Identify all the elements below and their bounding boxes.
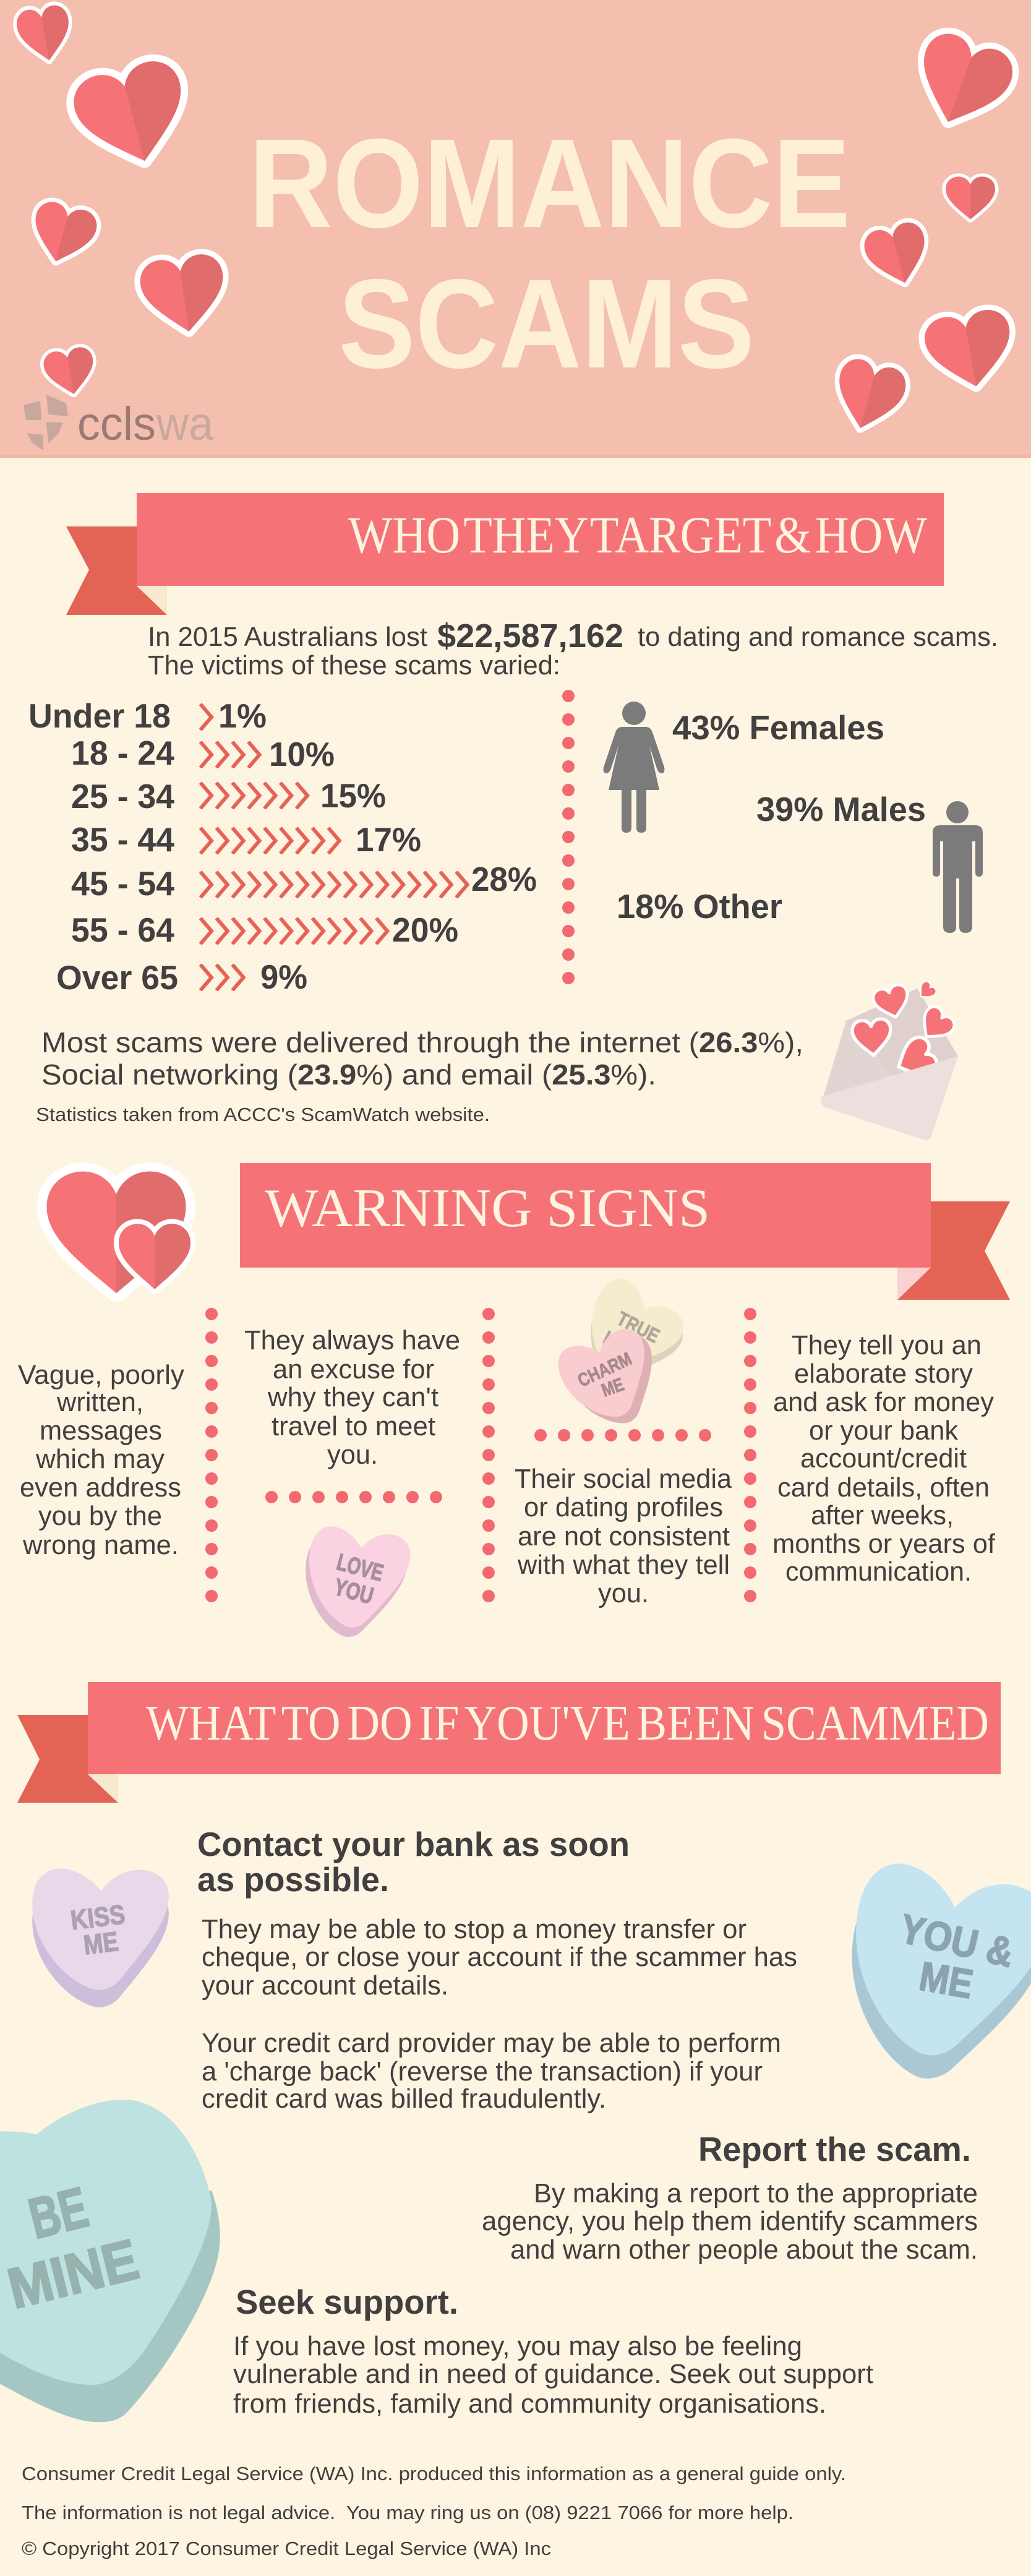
footer: Consumer Credit Legal Service (WA) Inc. produced this information as a general guide only. bbox=[22, 2463, 846, 2484]
row: 25-34: 15% bbox=[320, 777, 386, 815]
contact bank text: cheque, or close your account if the scammer has bbox=[202, 1942, 797, 1972]
warning 1 text: which may bbox=[35, 1444, 165, 1474]
candy heart: you and me: ME bbox=[916, 1952, 977, 2007]
heading: contact your bank: as possible. bbox=[197, 1861, 389, 1899]
header panel bbox=[0, 0, 1031, 458]
row: over 65 bbox=[56, 958, 307, 997]
title: SCAMS bbox=[338, 253, 755, 395]
candy heart: charm me: ME bbox=[599, 1374, 627, 1401]
warning 2 text: why they can't bbox=[267, 1382, 438, 1412]
row: 45-54: 28% bbox=[471, 861, 537, 898]
warning 4 text: card details, often bbox=[777, 1472, 990, 1503]
row: under 18 bbox=[28, 697, 267, 735]
row: under 18: 1% bbox=[218, 697, 267, 735]
banner: warning signs bbox=[240, 1163, 1010, 1300]
heading: contact your bank bbox=[197, 1826, 630, 1899]
heading: report the scam: Report the scam. bbox=[698, 2131, 971, 2168]
candy heart: true love: LOVE bbox=[600, 1326, 649, 1367]
candy heart: love you bbox=[297, 1524, 413, 1644]
footer: © Copyright 2017 Consumer Credit Legal Service (WA) Inc bbox=[22, 2538, 551, 2559]
candy heart: true love bbox=[565, 1271, 694, 1399]
intro text: $22,587,162 bbox=[437, 617, 623, 655]
row: over 65: Over 65 bbox=[56, 959, 178, 997]
row: 55-64 bbox=[71, 911, 458, 949]
candy heart: love you: LOVE bbox=[334, 1549, 386, 1587]
intro text bbox=[148, 617, 998, 680]
warning 4 text: months or years of bbox=[772, 1529, 996, 1559]
row: 55-64: 55 - 64 bbox=[71, 911, 175, 949]
icon: envelope with hearts bbox=[821, 979, 958, 1140]
row: 35-44 bbox=[71, 821, 421, 859]
warning 2 text bbox=[244, 1325, 460, 1470]
row: under 18: Under 18 bbox=[28, 697, 171, 735]
support text bbox=[233, 2331, 873, 2419]
warning 1 text: wrong name. bbox=[22, 1530, 179, 1560]
candy heart: kiss me: ME bbox=[82, 1926, 120, 1960]
title bbox=[249, 113, 850, 395]
icon: male bbox=[933, 801, 983, 933]
row: 45-54 bbox=[71, 861, 537, 903]
warning 2 text: an excuse for bbox=[273, 1354, 434, 1385]
row: 35-44: 35 - 44 bbox=[71, 821, 175, 859]
candy heart: kiss me: KISS bbox=[69, 1899, 127, 1936]
contact bank text: They may be able to stop a money transfer or bbox=[202, 1914, 747, 1944]
report text: By making a report to the appropriate bbox=[534, 2178, 978, 2209]
warning 4 text bbox=[772, 1330, 996, 1587]
row: over 65: 9% bbox=[260, 958, 307, 996]
footer: The information is not legal advice. You may ring us on (08) 9221 7066 for more help. bbox=[22, 2502, 794, 2523]
candy heart: be mine: BE bbox=[23, 2176, 94, 2251]
warning 4 text: They tell you an bbox=[792, 1330, 982, 1360]
label: males: 39% Males bbox=[756, 791, 926, 828]
row: 35-44: 17% bbox=[356, 821, 421, 859]
logo: ccls wa: ccls bbox=[77, 398, 156, 450]
warning 1 text: Vague, poorly bbox=[18, 1360, 184, 1390]
support text: from friends, family and community organisations. bbox=[233, 2389, 826, 2419]
warning 1 text: messages bbox=[40, 1415, 162, 1446]
report text: and warn other people about the scam. bbox=[510, 2235, 978, 2265]
warning 4 text: account/credit bbox=[800, 1443, 967, 1474]
banner: who they target: WHO THEY TARGET & HOW bbox=[348, 506, 928, 564]
candy heart: kiss me bbox=[32, 1868, 169, 2007]
warning 3 text: or dating profiles bbox=[524, 1492, 723, 1522]
warning 1 text: you by the bbox=[38, 1501, 162, 1531]
warning 1 text: written, bbox=[56, 1387, 143, 1417]
logo: ccls wa: wa bbox=[156, 398, 214, 450]
delivery text: Social networking ( 23.9%) and email ( 25.3%). bbox=[41, 1058, 656, 1091]
icon: female bbox=[604, 702, 664, 833]
title: ROMANCE bbox=[249, 113, 850, 254]
banner: who they target bbox=[66, 493, 944, 615]
heading: contact your bank: Contact your bank as soon bbox=[197, 1826, 630, 1863]
candy heart: be mine: MINE bbox=[2, 2228, 145, 2321]
source note: Statistics taken from ACCC's ScamWatch website. bbox=[36, 1104, 490, 1125]
candy heart: true love: TRUE bbox=[614, 1307, 663, 1347]
logo: ccls wa bbox=[24, 395, 214, 450]
warning 1 text bbox=[18, 1360, 184, 1560]
row: 25-34: 25 - 34 bbox=[71, 778, 175, 815]
banner: warning signs: WARNING SIGNS bbox=[265, 1179, 710, 1239]
warning 1 text: even address bbox=[20, 1472, 181, 1503]
warning 4 text: and ask for money bbox=[773, 1387, 994, 1417]
contact bank text: credit card was billed fraudulently. bbox=[202, 2084, 606, 2114]
delivery text bbox=[41, 1026, 803, 1091]
warning 3 text: Their social media bbox=[515, 1464, 732, 1494]
header hearts bbox=[14, 3, 1019, 437]
intro text: The victims of these scams varied: bbox=[148, 650, 560, 680]
banner: what to do bbox=[17, 1682, 1001, 1803]
support text: vulnerable and in need of guidance. Seek out support bbox=[233, 2359, 873, 2389]
warning 4 text: or your bank bbox=[809, 1415, 959, 1446]
delivery text: Most scams were delivered through the internet ( 26.3%), bbox=[41, 1026, 803, 1058]
warning 2 text: travel to meet bbox=[272, 1411, 435, 1441]
warning 3 text: are not consistent bbox=[518, 1521, 730, 1552]
warning 3 text bbox=[515, 1464, 732, 1608]
label: other: 18% Other bbox=[617, 888, 782, 925]
support text: If you have lost money, you may also be feeling bbox=[233, 2331, 802, 2361]
contact bank text bbox=[202, 1914, 797, 2114]
row: 18-24: 10% bbox=[269, 736, 335, 773]
row: 45-54: 45 - 54 bbox=[71, 865, 175, 903]
intro text: to dating and romance scams. bbox=[638, 622, 998, 652]
row: 55-64: 20% bbox=[392, 911, 458, 949]
candy heart: be mine bbox=[0, 2100, 220, 2422]
warning 3 text: with what they tell bbox=[517, 1550, 730, 1580]
warning 2 text: you. bbox=[327, 1440, 378, 1470]
footer bbox=[22, 2463, 846, 2559]
row: 25-34 bbox=[71, 777, 386, 815]
candy heart: you and me: YOU & bbox=[896, 1905, 1018, 1976]
candy heart: charm me: CHARM bbox=[575, 1349, 635, 1391]
heading: seek support: Seek support. bbox=[236, 2283, 458, 2321]
row: 18-24 bbox=[71, 734, 335, 773]
report text: agency, you help them identify scammers bbox=[482, 2206, 978, 2236]
contact bank text: Your credit card provider may be able to perform bbox=[202, 2028, 781, 2058]
report text bbox=[482, 2178, 978, 2265]
contact bank text: your account details. bbox=[202, 1970, 448, 2001]
warning 3 text: you. bbox=[598, 1578, 649, 1608]
intro text: In 2015 Australians lost bbox=[148, 622, 427, 652]
candy heart: charm me bbox=[552, 1321, 672, 1439]
candy heart: you and me bbox=[831, 1858, 1031, 2095]
icon: double heart bbox=[47, 1172, 190, 1293]
row: 18-24: 18 - 24 bbox=[71, 734, 175, 772]
candy heart: love you: YOU bbox=[331, 1574, 376, 1610]
chart: age groups bbox=[28, 697, 537, 997]
warning 4 text: communication. bbox=[785, 1556, 972, 1587]
warning 2 text: They always have bbox=[244, 1325, 460, 1355]
warning 4 text: after weeks, bbox=[811, 1500, 954, 1531]
label: females: 43% Females bbox=[672, 709, 884, 747]
warning 4 text: elaborate story bbox=[794, 1359, 973, 1389]
contact bank text: a 'charge back' (reverse the transaction) if your bbox=[202, 2056, 763, 2087]
